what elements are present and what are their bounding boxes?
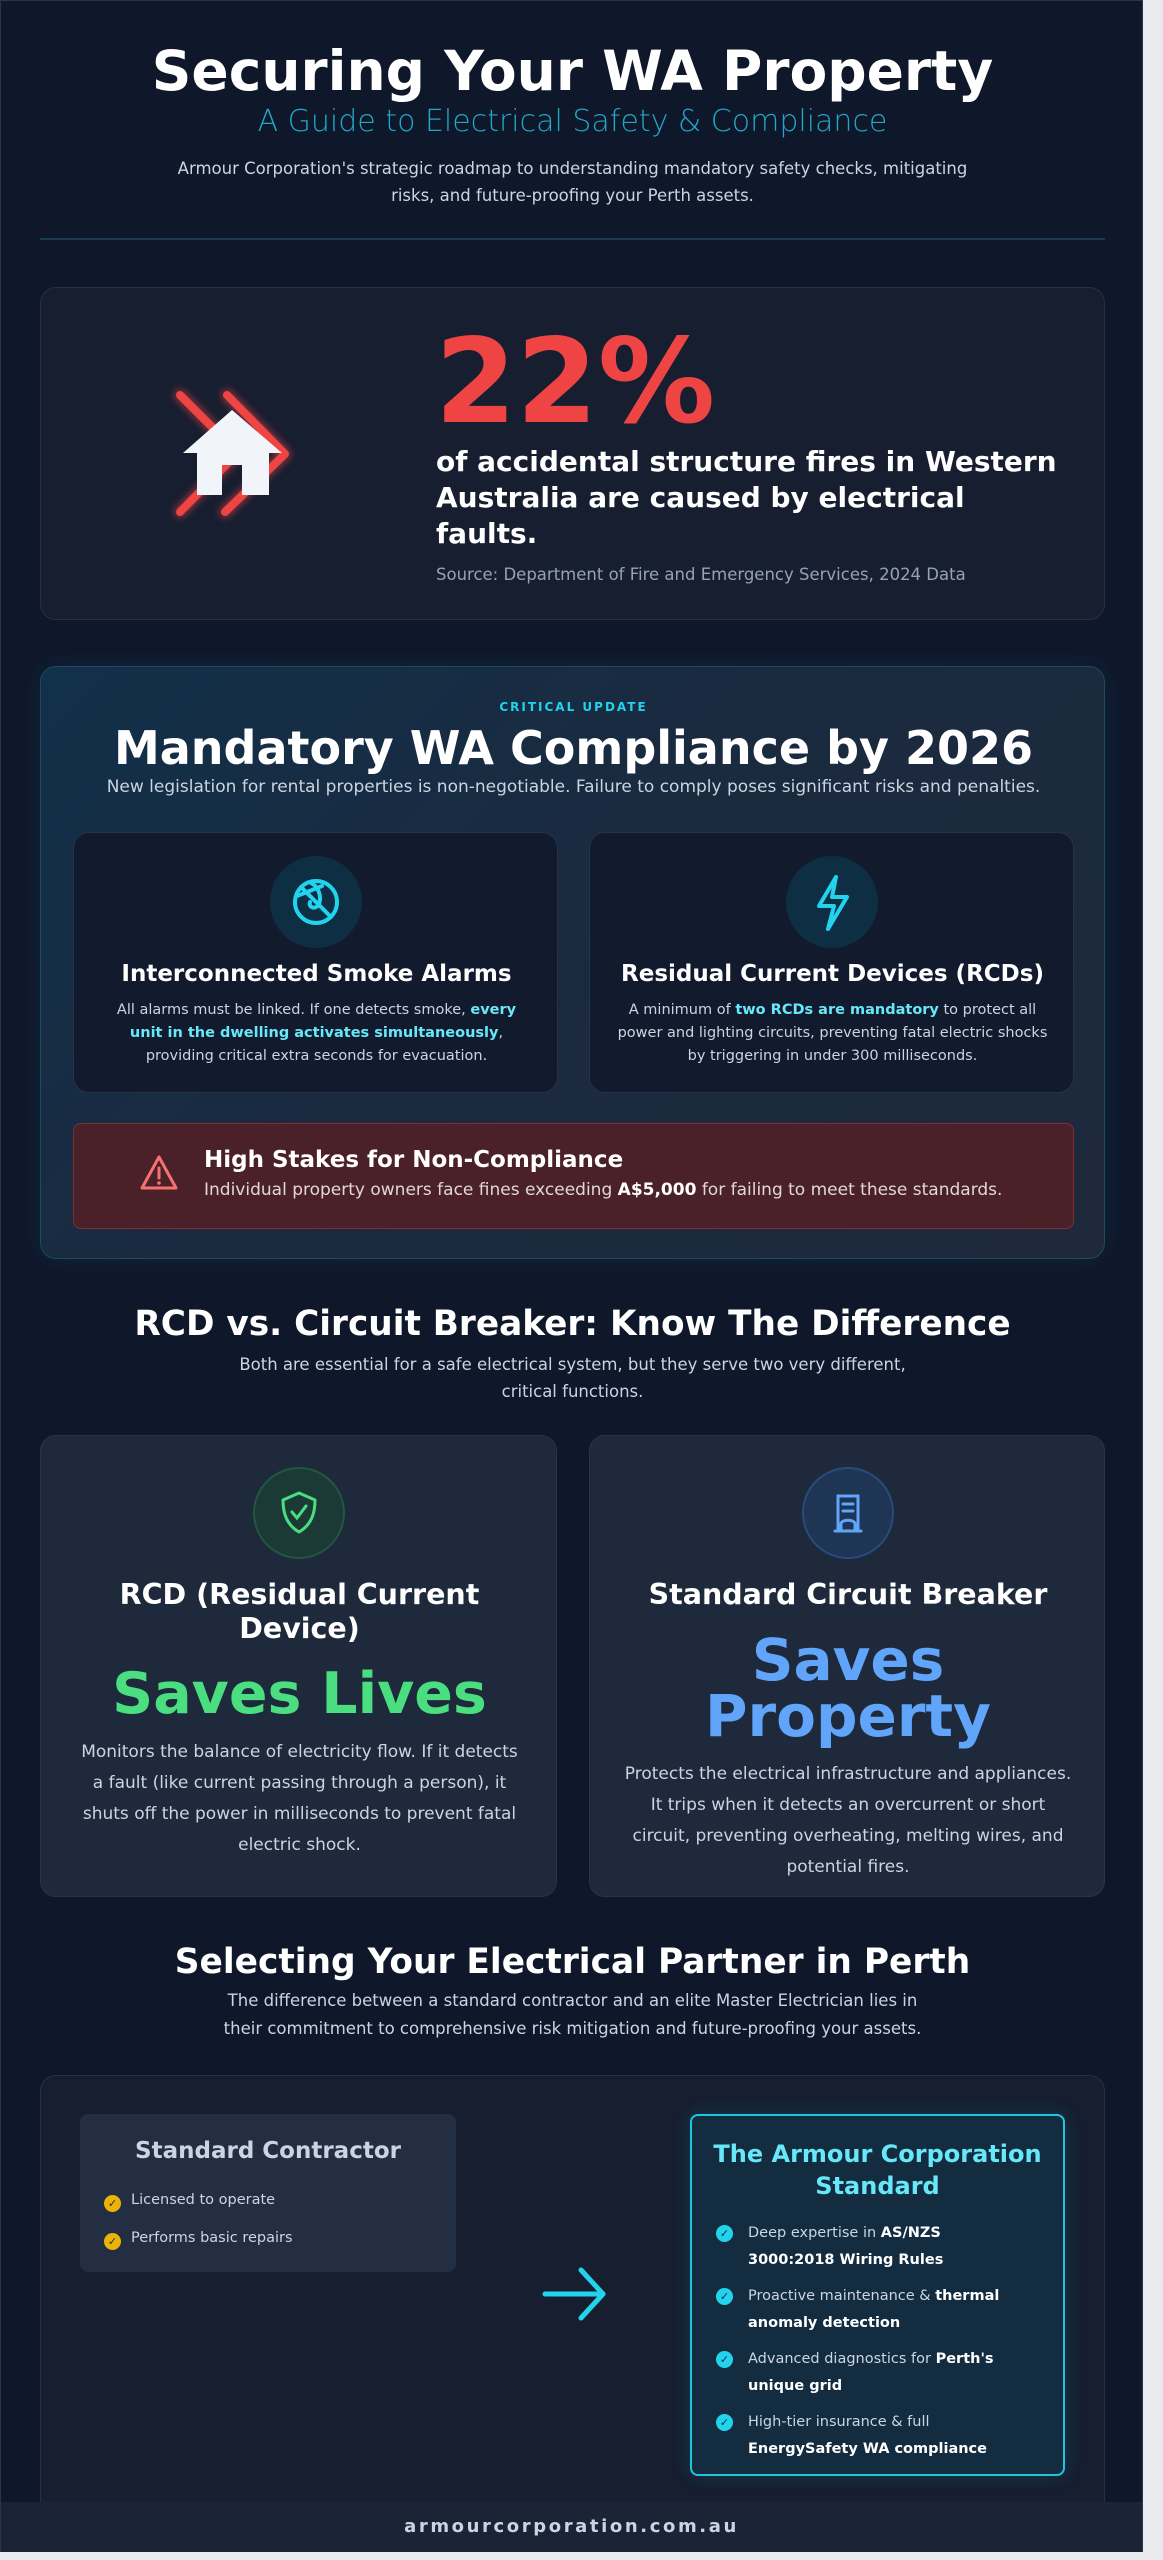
card heading: RCD (Residual Current Device): [120, 1578, 479, 1645]
icon: shield: [253, 1467, 345, 1559]
big label: saves property: Saves: [752, 1626, 944, 1694]
source: Source: Department of Fire and Emergency Services, 2024 Data: [436, 565, 966, 584]
label critical update: CRITICAL UPDATE: [499, 700, 648, 714]
list: ✓: [720, 2227, 729, 2240]
subtext: The difference between a standard contractor and an elite Master Electrician lies in their commitment to comprehensive risk mitigation and future-proofing your assets.: [224, 1991, 921, 2038]
big label: saves property: [705, 1626, 991, 1750]
footer: armourcorporation.com.au: [404, 2516, 739, 2537]
arrow: [542, 2268, 606, 2320]
card: RCD saves lives: [40, 1435, 557, 1897]
card heading: Interconnected Smoke Alarms: [121, 961, 512, 987]
panel: partner comparison: [40, 2075, 1105, 2545]
card: smoke alarms: [73, 832, 558, 1093]
big stat 22%: 22%: [435, 313, 715, 450]
box: standard contractor: [80, 2114, 456, 2272]
list: ✓: [720, 2290, 729, 2303]
box heading: Standard Contractor: [135, 2138, 401, 2164]
big label: saves property: Property: [705, 1682, 991, 1750]
icon: house with electrical fault: [170, 385, 295, 522]
card heading: Standard Circuit Breaker: [649, 1578, 1047, 1611]
box: armour corporation standard: [690, 2114, 1065, 2476]
card heading: Residual Current Devices (RCDs): [621, 961, 1044, 987]
intro text: Armour Corporation's strategic roadmap to understanding mandatory safety checks, mitigating risks, and future-proofing your Perth assets.: [178, 159, 967, 205]
heading: selecting partner: Selecting Your Electrical Partner in Perth: [175, 1942, 970, 1982]
list: ✓: [720, 2353, 729, 2366]
card: RCDs: [589, 832, 1074, 1093]
panel: mandatory compliance: [40, 666, 1105, 1259]
list: ✓: [720, 2416, 729, 2429]
box heading: The Armour Corporation Standard: [713, 2140, 1042, 2200]
description: Protects the electrical infrastructure and appliances. It trips when it detects an overcurrent or short circuit, preventing overheating, melting wires, and potential fires.: [625, 1764, 1071, 1877]
list: ✓: [108, 2197, 117, 2210]
panel: statistic: [40, 287, 1105, 620]
subheading: New legislation for rental properties is non-negotiable. Failure to comply poses significant risks and penalties.: [107, 777, 1040, 797]
list: Proactive maintenance & thermal anomaly detection: [748, 2288, 999, 2331]
card text: All alarms must be linked. If one detects smoke, every unit in the dwelling activates simultaneously, providing critical extra seconds for evacuation.: [117, 1002, 516, 1064]
subtext: Both are essential for a safe electrical system, but they serve two very different, critical functions.: [239, 1355, 906, 1401]
list: High-tier insurance & full EnergySafety WA compliance: [748, 2414, 987, 2457]
list: [716, 2225, 999, 2457]
icon: warning: [140, 1155, 178, 1190]
list: Deep expertise in AS/NZS 3000:2018 Wiring Rules: [748, 2225, 943, 2268]
list: Advanced diagnostics for Perth's unique grid: [748, 2351, 994, 2394]
stat description: of accidental structure fires in Western Australia are caused by electrical faults.: [436, 445, 1057, 550]
footer: [1, 2502, 1142, 2552]
description: Monitors the balance of electricity flow. If it detects a fault (like current passing through a person), it shuts off the power in milliseconds to prevent fatal electric shock.: [81, 1742, 518, 1855]
warning heading: High Stakes for Non-Compliance: [204, 1147, 623, 1173]
icon: breaker: [802, 1467, 894, 1559]
card text: A minimum of two RCDs are mandatory to protect all power and lighting circuits, preventing fatal electric shocks by triggering in under 300 milliseconds.: [618, 1002, 1047, 1064]
list: [104, 2192, 293, 2250]
list: ✓: [108, 2235, 117, 2248]
list: Performs basic repairs: [131, 2230, 293, 2246]
heading: RCD vs circuit breaker: RCD vs. Circuit Breaker: Know The Difference: [134, 1304, 1011, 1344]
callout: non-compliance warning: [73, 1123, 1074, 1229]
warning text: Individual property owners face fines exceeding A$5,000 for failing to meet these standards.: [204, 1180, 1002, 1200]
title: Securing Your WA Property: [152, 39, 993, 103]
big label: saves lives: Saves Lives: [112, 1661, 487, 1727]
subtitle: A Guide to Electrical Safety & Compliance: [258, 104, 887, 139]
list: Licensed to operate: [131, 2192, 275, 2208]
icon: smoke alarm: [270, 856, 362, 948]
heading: Mandatory WA Compliance by 2026: [114, 721, 1033, 775]
card: circuit breaker saves property: [589, 1435, 1105, 1897]
icon: lightning: [786, 856, 878, 948]
